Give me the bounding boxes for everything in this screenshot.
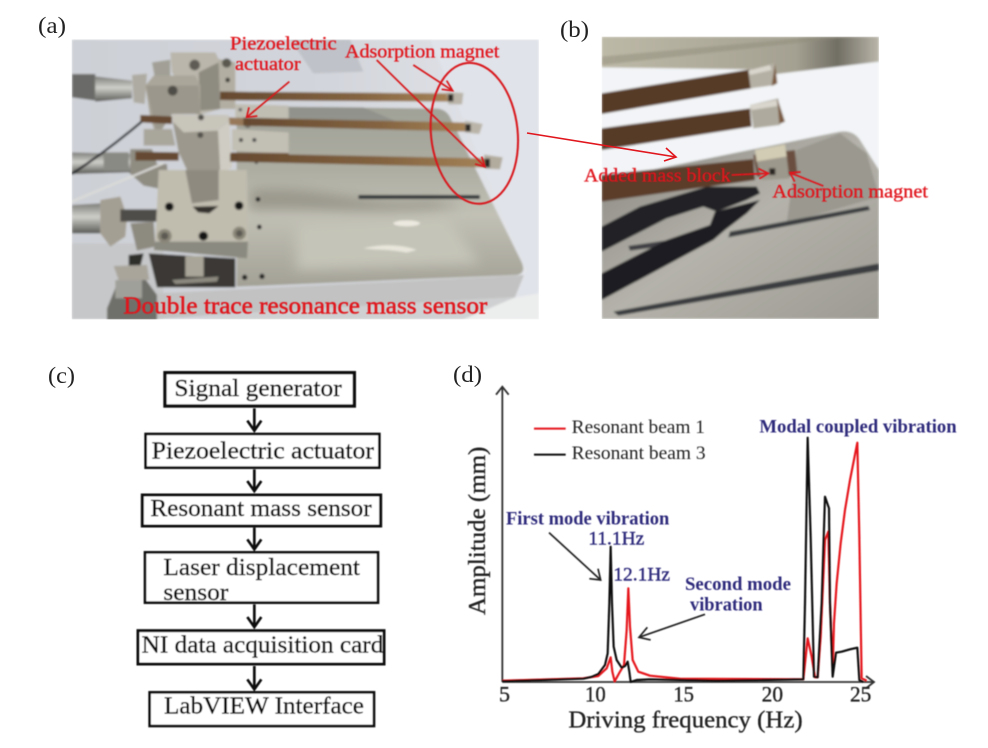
panel label (a): (a) [38, 13, 66, 38]
flow arrows [247, 408, 261, 689]
box: laser displacement sensor [145, 552, 378, 606]
label: second mode vibration [685, 574, 791, 616]
tweezers [602, 187, 760, 252]
x axis tick labels: 5 [499, 682, 510, 707]
box: signal generator [165, 373, 354, 406]
slots [728, 206, 870, 237]
box: LabVIEW interface: LabVIEW Interface [164, 693, 364, 719]
wires [72, 122, 142, 174]
label: 12.1Hz: 12.1Hz [613, 565, 670, 586]
left mechanics, lower [72, 170, 265, 320]
label: piezoelectric actuator [230, 33, 337, 75]
beams [602, 69, 752, 114]
label: modal coupled vibration: Modal coupled vibration [759, 417, 957, 438]
label: piezoelectric actuator: Piezoelectric [230, 33, 337, 54]
arrow: first mode [549, 533, 601, 580]
curve: resonant beam 1 [502, 443, 867, 681]
x axis tick labels: 25 [850, 682, 871, 707]
panel label (c): (c) [48, 363, 75, 388]
label: added mass block: Added mass block [584, 166, 731, 187]
legend: Resonant beam 1 [572, 417, 705, 438]
x axis tick labels [499, 682, 871, 707]
beams [220, 92, 448, 102]
label: 11.1Hz: 11.1Hz [588, 528, 645, 549]
x axis tick labels: 20 [762, 682, 783, 707]
annotation: arrow to adsorption magnet [790, 172, 823, 186]
annotation: arrow to piezoelectric actuator [247, 82, 289, 117]
label: second mode vibration: vibration [690, 595, 763, 616]
panel label (b): (b) [560, 17, 589, 42]
box: resonant mass sensor: Resonant mass sensor [150, 496, 372, 522]
box: piezoelectric actuator [146, 434, 379, 468]
box: NI data acquisition card: NI data acquisition card [142, 633, 383, 659]
box: laser displacement sensor: sensor [163, 580, 228, 606]
axes [496, 387, 874, 688]
x axis tick labels: 10 [585, 682, 606, 707]
panel a: photo of the resonance mass sensor [72, 33, 539, 320]
x axis title: Driving frequency (Hz) [568, 707, 803, 733]
panel b: close-up photo with added mass block [584, 37, 929, 319]
box: laser displacement sensor: Laser displacement [163, 555, 360, 581]
label: second mode vibration: Second mode [685, 574, 791, 595]
panel label (d): (d) [453, 362, 482, 387]
label: double trace resonance mass sensor: Double trace resonance mass sensor [123, 292, 487, 319]
label: first mode vibration: First mode vibration [506, 508, 670, 529]
label: adsorption magnet: Adsorption magnet [345, 42, 500, 63]
arrow: second mode [639, 614, 705, 640]
annotation: arrows to adsorption magnets [377, 60, 485, 167]
box: piezoelectric actuator: Piezoelectric actuator [152, 438, 374, 464]
plate [150, 275, 524, 319]
box: signal generator: Signal generator [174, 376, 342, 402]
label: piezoelectric actuator: actuator [235, 54, 301, 75]
legend: Resonant beam 3 [572, 443, 706, 464]
annotation: arrow to added mass block [732, 169, 768, 179]
box: LabVIEW interface [150, 692, 374, 726]
curve: resonant beam 3 [502, 438, 863, 682]
label: adsorption magnet: Adsorption magnet [772, 181, 929, 202]
annotation: ellipse around the magnets [424, 59, 525, 208]
y axis title: Amplitude (mm) [465, 447, 491, 615]
panel c: flow chart [138, 373, 384, 726]
panel d: frequency response chart [465, 387, 957, 733]
x axis tick labels: 15 [673, 682, 694, 707]
plate [602, 131, 879, 319]
legend [534, 417, 706, 464]
arrow from panel a to panel b [527, 133, 676, 161]
left mechanics, upper [72, 52, 289, 191]
